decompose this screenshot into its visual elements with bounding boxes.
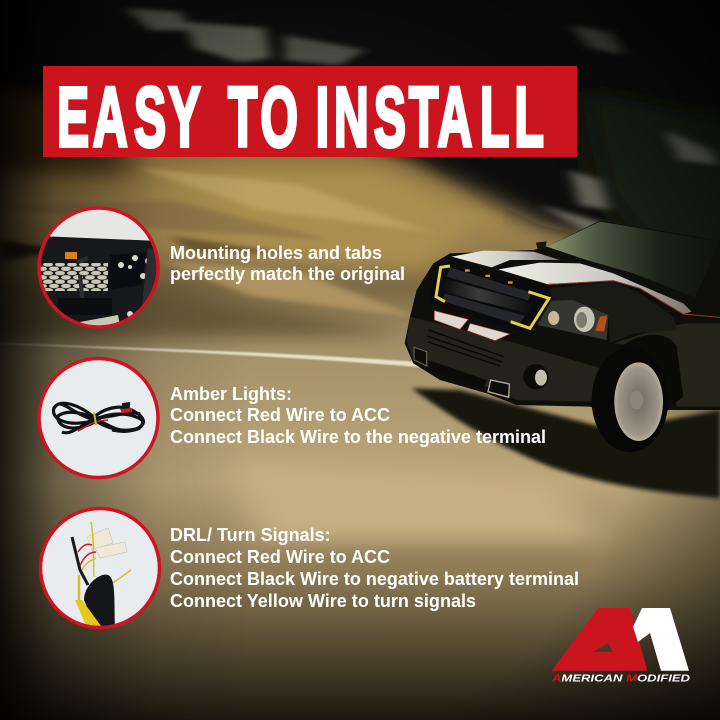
title text: EASY TO INSTALL [57,70,544,164]
bumper accents [434,311,468,329]
step 2 text: Connect Red Wire to ACC [170,405,390,425]
wheel [592,348,668,452]
fog light [523,364,549,389]
mirror [536,241,547,249]
step 3 text: Connect Yellow Wire to turn signals [170,591,476,611]
step 2 photo: wiring harness [39,358,158,478]
truck shadow [412,388,720,498]
lower bumper grille [427,330,503,366]
step 3 photo: DRL wiring [40,508,160,630]
title banner [43,66,577,164]
grille [428,260,550,332]
windshield [547,222,720,297]
logo wordmark: AMERICAN MODIFIED [551,672,691,684]
headlight [537,300,608,340]
truck [405,221,720,498]
step 1 text: perfectly match the original [170,264,405,284]
step 1 photo: grille mounting holes [38,208,160,330]
white hood stripes [452,251,560,267]
step 3 text: Connect Black Wire to negative battery terminal [170,569,579,589]
step 1 text: Mounting holes and tabs [170,243,382,263]
step 3 text: Connect Red Wire to ACC [170,547,390,567]
step 3 text: DRL/ Turn Signals: [170,525,331,545]
wheel arch [607,335,683,410]
logo: American Modified [551,608,691,684]
truck body [405,221,720,413]
step 2 text: Amber Lights: [170,384,292,404]
amber DRL lights [436,266,549,328]
step 2 text: Connect Black Wire to the negative terminal [170,427,546,447]
